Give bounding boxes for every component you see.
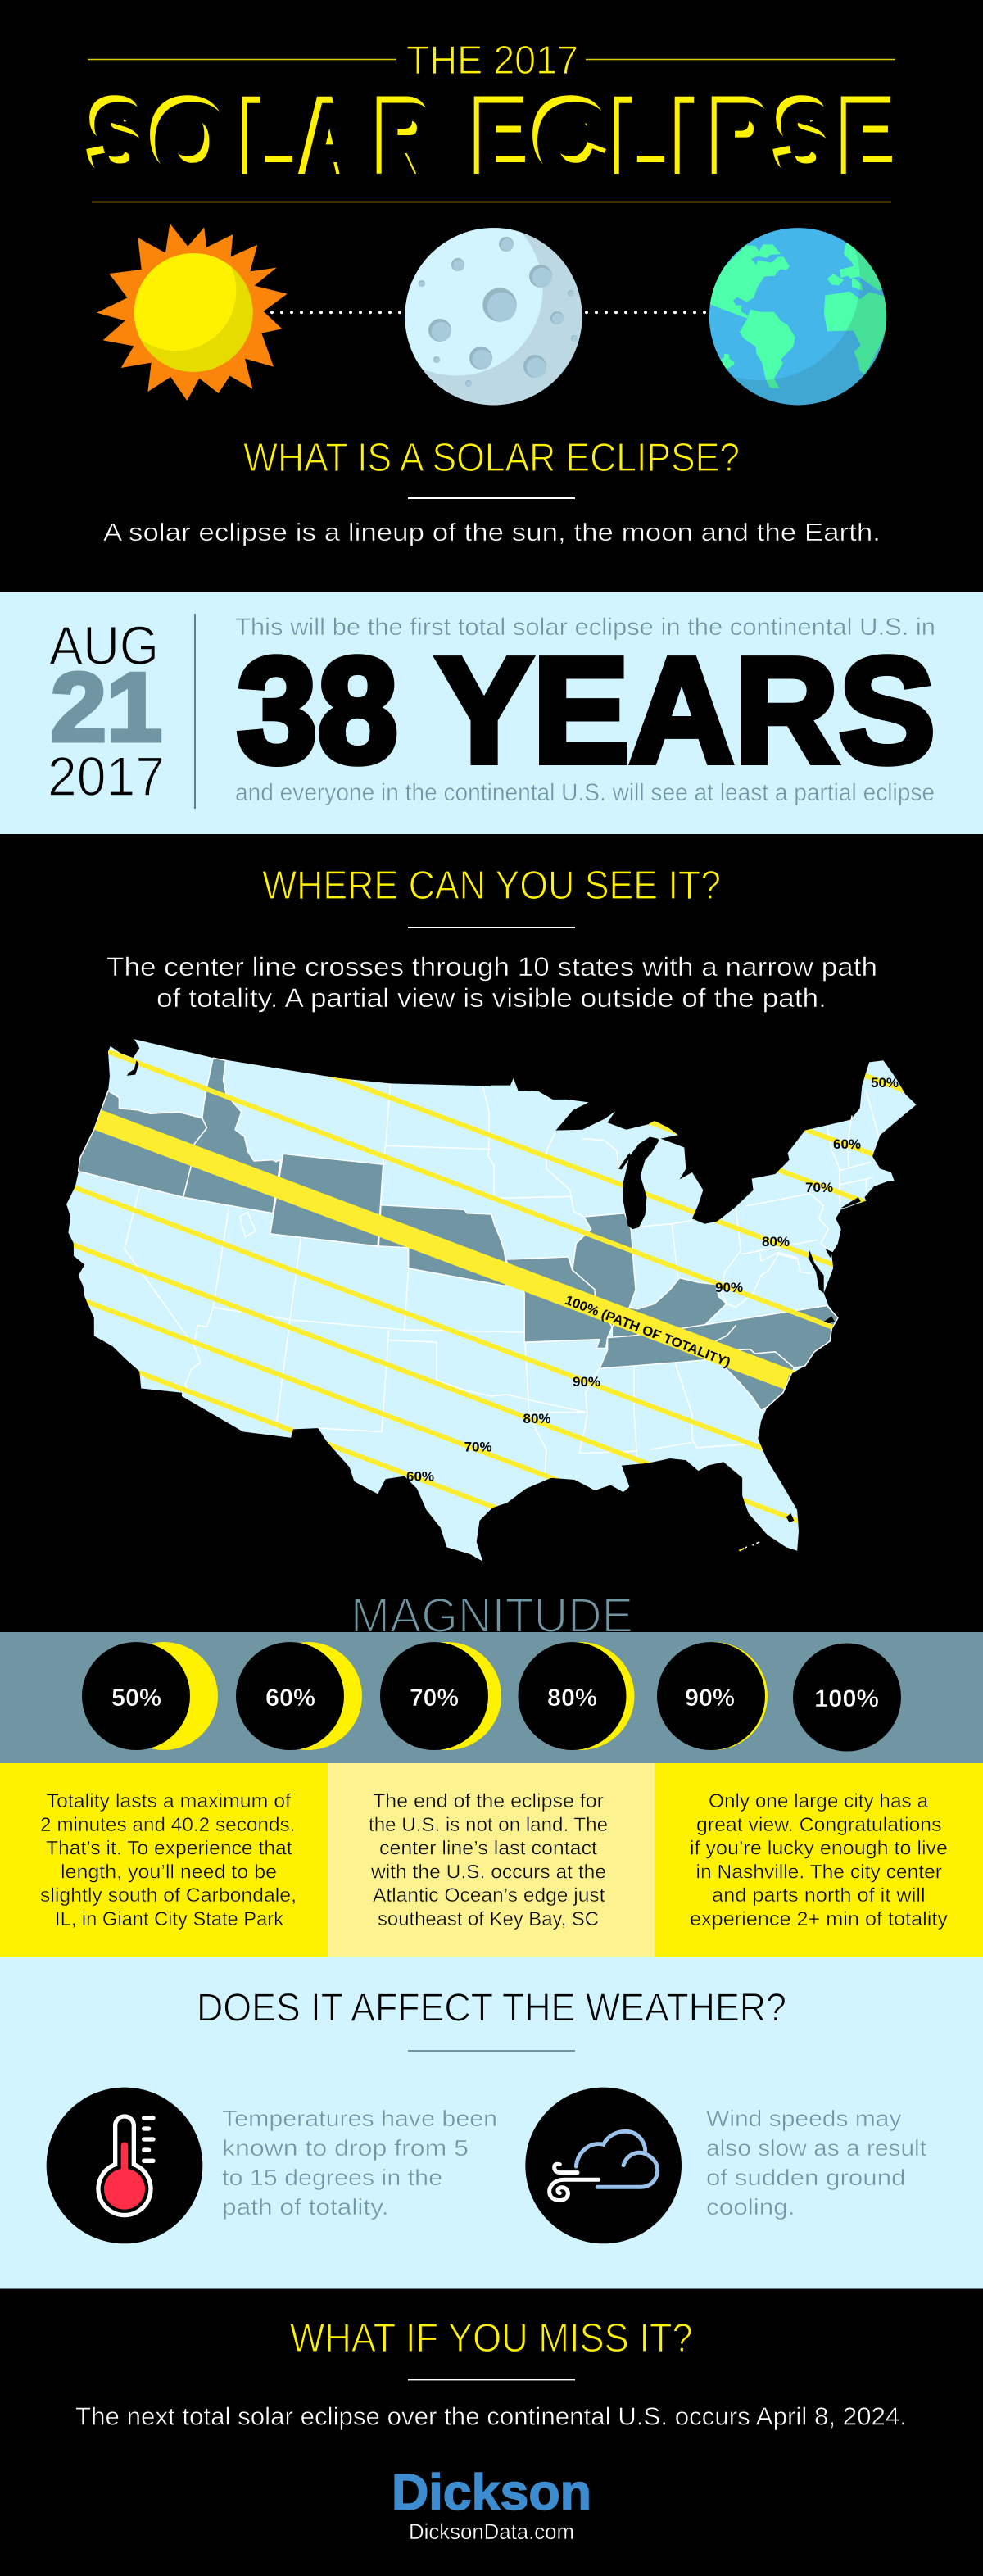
title: solar eclipse: P [709,79,768,193]
title: solar eclipse: L [244,85,297,199]
text: center line description: The center line crosses through 10 states with a narrow path [106,952,877,982]
magnitude labels: 100% (PATH OF TOTALITY) [563,1294,732,1370]
title: solar eclipse: C [532,79,605,193]
text: temperatures [222,2106,497,2220]
title: solar eclipse: S [773,79,829,193]
magnitude labels: 80% [762,1234,790,1249]
fact: totality duration: That’s it. To experience that [46,1838,292,1860]
magnitude labels: 70% [464,1440,492,1455]
text: wind speeds: also slow as a result [706,2135,926,2161]
text: first total eclipse: This will be the first total solar eclipse in the continental U.S. in [235,614,935,641]
text: temperatures: path of totality. [222,2194,388,2220]
date: aug 21 2017: AUG [49,615,159,677]
fact: nashville: experience 2+ min of totality [690,1908,948,1930]
heading: what is a solar eclipse: WHAT IS A SOLAR ECLIPSE? [243,436,740,480]
fact: end of the eclipse: with the U.S. occurs at the [370,1861,606,1883]
title: solar eclipse: C [537,85,609,199]
dotted line: sun to moon [272,311,401,314]
title: solar eclipse: I [677,85,702,199]
fact: totality duration: 2 minutes and 40.2 seconds. [40,1814,295,1836]
title: solar eclipse: E [471,79,526,193]
80% disc: 80% [547,1685,597,1712]
icon: sun [97,224,288,401]
text: wind speeds: Wind speeds may [706,2106,901,2131]
heading: does it affect the weather: DOES IT AFFECT THE WEATHER? [197,1986,786,2030]
panel: 38 years band [0,592,983,834]
date: aug 21 2017 [48,615,165,808]
logo: dickson: Dickson [392,2465,591,2521]
fact: totality duration: slightly south of Carbondale, [40,1884,297,1907]
title: solar eclipse: E [838,79,893,193]
60% disc: 60% [265,1685,315,1712]
fact: nashville: great view. Congratulations [696,1814,942,1836]
100% disc [793,1644,901,1752]
panel: magnitude scale [0,1632,983,1763]
title: solar eclipse: L [611,79,664,193]
states in the path of totality [79,1058,838,1410]
text: eclipse definition: A solar eclipse is a lineup of the sun, the moon and the Earth. [103,518,881,546]
title: solar eclipse: A [305,85,354,199]
icon: thermometer [47,2088,202,2243]
fact: nashville: in Nashville. The city center [696,1861,942,1883]
date: aug 21 2017: 21 [51,653,162,762]
icon: earth [707,228,890,405]
map: path of totality across the US [63,1039,925,1566]
50% disc [82,1642,218,1750]
title: the 2017: THE 2017 [406,39,578,83]
fact: end of the eclipse [369,1790,608,1930]
title: solar eclipse: I [672,79,697,193]
title: solar eclipse: S [92,85,147,199]
heading: what if you miss it: WHAT IF YOU MISS IT? [290,2316,693,2361]
title: solar eclipse: S [778,85,834,199]
fact: nashville [690,1790,948,1930]
fact: totality duration: Totality lasts a maximum of [47,1790,291,1812]
fact: end of the eclipse: center line’s last contact [379,1838,597,1860]
fact: nashville: Only one large city has a [709,1790,929,1812]
magnitude labels: 60% [833,1136,861,1152]
title: solar eclipse: P [713,85,772,199]
fact: end of the eclipse: the U.S. is not on land. The [369,1814,608,1836]
80% disc [518,1642,634,1750]
date: aug 21 2017: 2017 [48,746,165,808]
lakes and bays [618,1136,861,1551]
title: solar eclipse: L [239,79,292,193]
magnitude labels: 70% [805,1180,833,1195]
text: next eclipse: The next total solar eclipse over the continental U.S. occurs April 8, 2024. [75,2402,907,2430]
fact: end of the eclipse: The end of the eclipse for [373,1790,604,1812]
magnitude labels: 90% [573,1374,600,1390]
text: wind speeds: of sudden ground [706,2165,906,2190]
50% disc: 50% [111,1685,161,1712]
90% disc [657,1642,768,1750]
yellow magnitude bands [73,1049,905,1524]
icon: wind and cloud [525,2088,682,2243]
text: website: DicksonData.com [409,2519,574,2544]
text: temperatures: Temperatures have been [222,2106,497,2131]
100% disc: 100% [814,1685,879,1712]
fact: totality duration: IL, in Giant City State Park [55,1908,284,1930]
magnitude labels: 60% [406,1469,434,1485]
magnitude labels [406,1075,899,1485]
heading: magnitude: MAGNITUDE [351,1589,633,1643]
60% disc [236,1642,362,1750]
text: partial eclipse everywhere: and everyone in the continental U.S. will see at least a partial eclipse [235,779,935,806]
fact: end of the eclipse: southeast of Key Bay, SC [378,1908,599,1930]
title: solar eclipse: O [154,85,231,199]
magnitude labels: 80% [523,1411,551,1426]
title: solar eclipse: E [843,85,898,199]
70% disc [380,1642,501,1750]
text: wind speeds [706,2106,926,2220]
fact: totality duration: length, you’ll need to be [61,1861,277,1883]
fact: nashville: if you’re lucky enough to live [690,1838,948,1860]
magnitude labels: 90% [715,1280,743,1295]
panel: weather [0,1957,983,2289]
icon: moon [405,228,582,405]
big number: 38 years: 38 YEARS [237,626,935,794]
title: solar eclipse [87,79,897,199]
title: solar eclipse: R [374,79,430,193]
fact: totality duration [40,1790,297,1930]
title: solar eclipse: E [476,85,531,199]
text: temperatures: to 15 degrees in the [222,2165,442,2190]
text: wind speeds: cooling. [706,2194,795,2220]
text: center line description: of totality. A partial view is visible outside of the path. [156,983,827,1013]
panel: facts [0,1763,983,1957]
heading: where can you see it: WHERE CAN YOU SEE IT? [262,864,721,908]
text: center line description [106,952,877,1013]
dotted line: moon to earth [587,311,706,314]
title: solar eclipse: A [300,79,349,193]
title: solar eclipse: O [149,79,226,193]
title: solar eclipse: S [87,79,143,193]
title: solar eclipse: R [378,85,435,199]
70% disc: 70% [410,1685,459,1712]
title: solar eclipse: L [616,85,669,199]
magnitude labels: 50% [871,1075,899,1091]
90% disc: 90% [685,1685,735,1712]
fact: end of the eclipse: Atlantic Ocean’s edge just [373,1884,605,1907]
fact: nashville: and parts north of it will [712,1884,926,1907]
text: temperatures: known to drop from 5 [222,2135,469,2161]
